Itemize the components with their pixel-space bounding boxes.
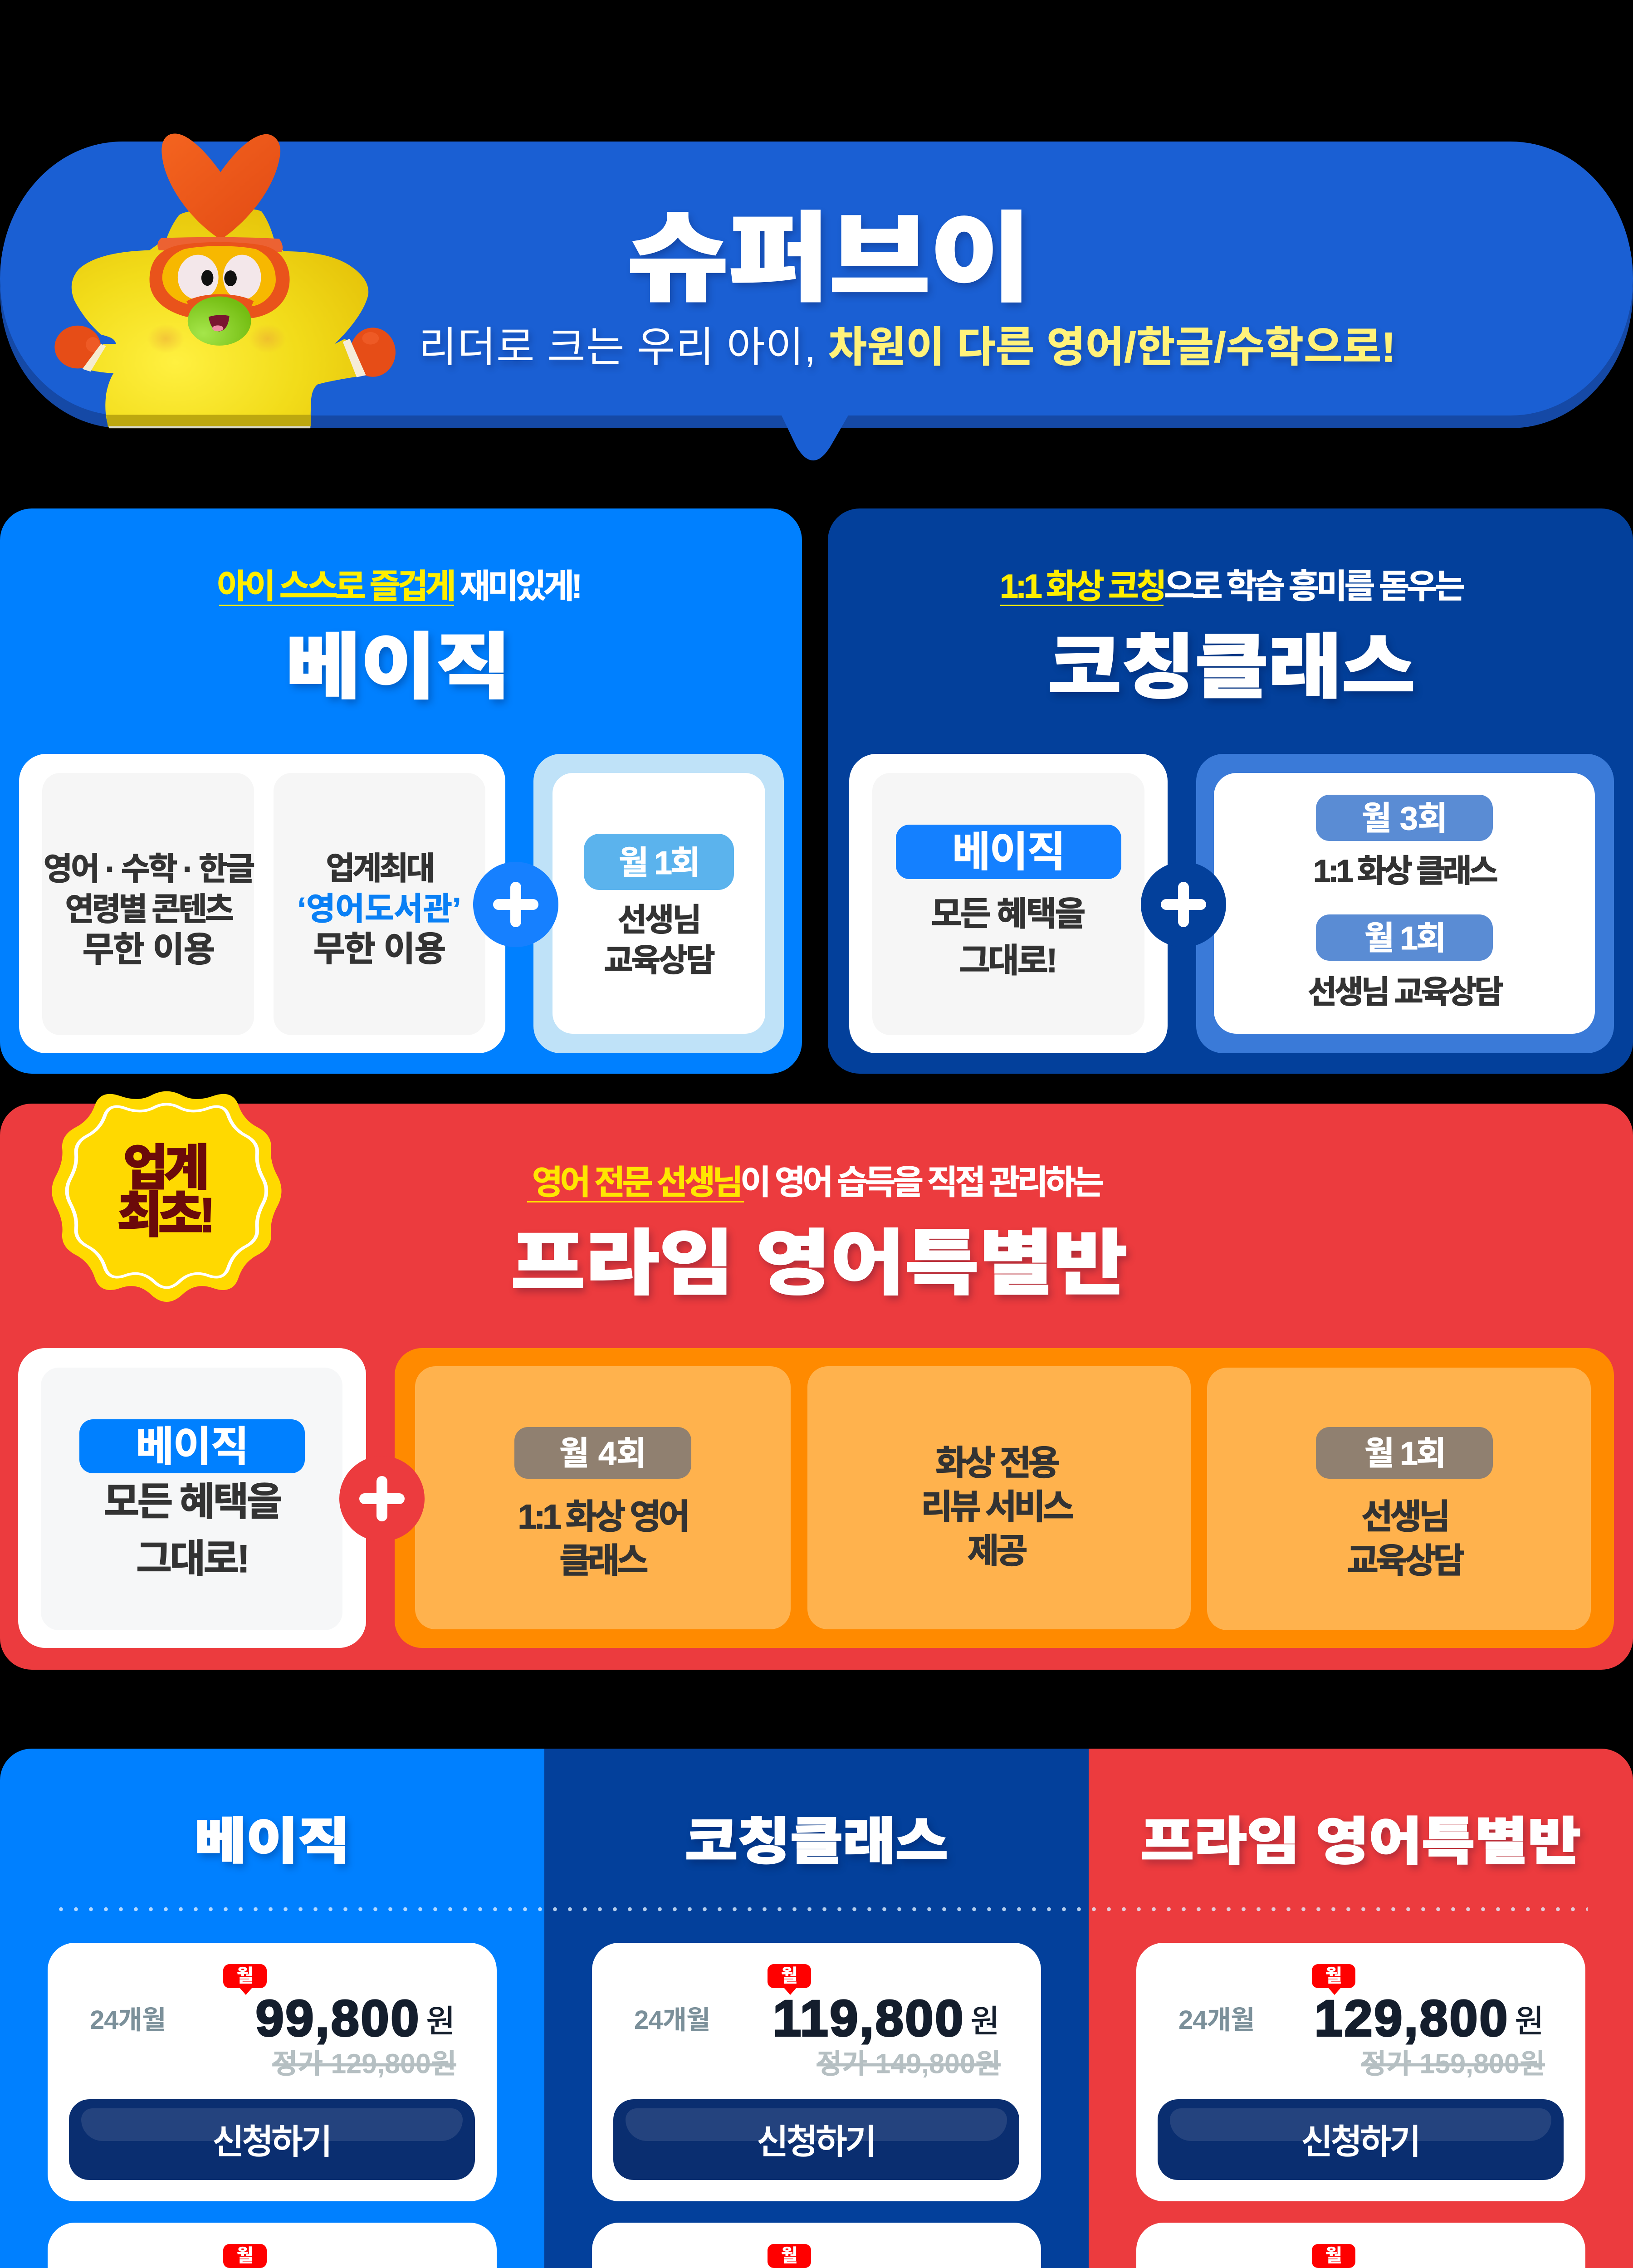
price card: 12 months: [592, 2223, 1041, 2268]
button: [69, 2099, 475, 2180]
pricing column: coaching class: [544, 1749, 1089, 2268]
monthly tag: [1312, 1964, 1355, 1988]
button: 신청하기: [757, 2123, 875, 2161]
consulting text: [1347, 1495, 1462, 1583]
panel title: 베이직: [286, 627, 511, 708]
badge label: 월 1회: [1364, 1436, 1444, 1472]
panel: prime English class: [0, 1104, 1633, 1670]
video class text: 1:1 화상 영어: [518, 1498, 687, 1536]
consulting text: 선생님: [1361, 1498, 1447, 1536]
subtitle: 영어 전문 선생님이 영어 습득을 직접 관리하는: [532, 1163, 1101, 1201]
feature text: library: 무한 이용: [313, 930, 445, 969]
basic text: 그대로!: [136, 1537, 248, 1581]
seal badge: industry first: 최초!: [117, 1188, 211, 1242]
badge: monthly 1: [584, 834, 734, 890]
consulting text: [604, 900, 714, 981]
panel title: 프라임 영어특별반: [511, 1224, 1128, 1303]
monthly tag: 월: [237, 2246, 253, 2266]
price card: 24 months: [592, 1943, 1041, 2201]
tagline: 리더로 크는 우리 아이, 차원이 다른 영어/한글/수학으로!: [419, 324, 1396, 371]
review text: [921, 1442, 1071, 1573]
basic badge: [896, 825, 1121, 879]
monthly tag: 월: [1325, 1966, 1342, 1986]
badge label: 월 3회: [1362, 801, 1447, 837]
bubble main surface: [0, 142, 1633, 415]
panel title: 코칭클래스: [1048, 629, 1415, 707]
monthly tag: [1312, 2244, 1355, 2268]
white card: [849, 754, 1168, 1053]
feature text: content: 연령별 콘텐츠: [65, 892, 232, 927]
badge label: 월 1회: [619, 845, 699, 881]
feature: content: [42, 773, 254, 1035]
review text: 제공: [968, 1532, 1025, 1570]
monthly tag: 월: [237, 1966, 253, 1986]
monthly tag: [768, 2244, 811, 2268]
feature text: content: [44, 849, 253, 971]
monthly tag: 월: [1325, 2246, 1342, 2266]
monthly tag: [223, 1964, 267, 1988]
feature text: content: 영어 · 수학 · 한글: [44, 851, 253, 886]
button: [1158, 2099, 1564, 2180]
consulting text: 선생님: [617, 902, 700, 938]
icon: plus: [339, 1456, 425, 1541]
basic badge: [79, 1419, 305, 1473]
panel: coaching class: [828, 508, 1633, 1074]
icon: plus: [1141, 862, 1226, 947]
consulting inner card: [552, 773, 765, 1034]
seal badge: industry first: [45, 1084, 290, 1311]
column title: 베이직: [195, 1814, 350, 1869]
subtitle: 아이 스스로 즐겁게 재미있게!: [217, 567, 580, 605]
column title: 프라임 영어특별반: [1141, 1813, 1581, 1870]
subtitle underline: [219, 605, 454, 606]
regular price: 정가 159,800원: [1361, 2048, 1545, 2079]
feature text: library: ‘영어도서관’: [298, 891, 461, 926]
badge label: 월 1회: [1364, 920, 1444, 957]
monthly tag: [768, 1964, 811, 1988]
price: 119,800: [773, 1990, 965, 2047]
subtitle underline: [527, 1201, 744, 1202]
consulting text: 교육상담: [1347, 1542, 1462, 1580]
badge: monthly 1: [1316, 914, 1493, 961]
button: [613, 2099, 1019, 2180]
seal badge: industry first: 업계: [123, 1140, 206, 1195]
basic badge label: 베이직: [136, 1424, 248, 1470]
basic text: 모든 혜택을: [931, 895, 1084, 933]
currency: 원: [426, 2004, 455, 2039]
consulting card: [533, 754, 784, 1053]
pricing column: basic: [0, 1749, 544, 2268]
badge: monthly 1: [1316, 1427, 1493, 1479]
monthly tag: 월: [781, 1966, 797, 1986]
term: 24개월: [90, 2005, 166, 2035]
feature text: library: 업계최대: [326, 851, 433, 886]
badge: monthly 4: [514, 1427, 691, 1479]
feature: library: [274, 773, 485, 1035]
icon: yellow star mascot with goggles: [45, 118, 408, 445]
review text: 화상 전용: [935, 1444, 1057, 1482]
class text: 1:1 화상 클래스: [1313, 853, 1496, 889]
orange card: [395, 1348, 1614, 1648]
bubble tail: [771, 408, 862, 467]
white feature card: [19, 754, 505, 1053]
subtitle: 1:1 화상 코칭으로 학습 흥미를 돋우는: [1000, 567, 1462, 605]
cell: consulting: [1207, 1368, 1591, 1630]
price: 99,800: [255, 1990, 420, 2047]
white card: [18, 1348, 366, 1648]
grey inner card: [872, 773, 1144, 1035]
pricing column: prime English class: [1089, 1749, 1633, 2268]
price card: 24 months: [48, 1943, 497, 2201]
grey inner card: [41, 1368, 342, 1630]
cell: video class: [415, 1366, 791, 1629]
consulting text: 교육상담: [604, 943, 714, 978]
monthly tag: 월: [781, 2246, 797, 2266]
column title: 코칭클래스: [685, 1813, 948, 1870]
button: 신청하기: [212, 2123, 330, 2161]
video class text: [518, 1495, 687, 1583]
feature text: content: 무한 이용: [83, 931, 214, 969]
feature text: library: [298, 848, 461, 971]
basic text: 모든 혜택을: [103, 1480, 280, 1524]
consulting text: 선생님 교육상담: [1308, 974, 1501, 1010]
basic text: [103, 1473, 280, 1588]
basic text: [931, 890, 1084, 984]
currency: 원: [1515, 2004, 1544, 2039]
basic text: 그대로!: [959, 942, 1056, 979]
cell: review service: [807, 1366, 1191, 1629]
button: 신청하기: [1301, 2123, 1419, 2161]
video class text: 클래스: [559, 1542, 645, 1580]
basic badge label: 베이직: [952, 829, 1065, 875]
panel: basic plan: [0, 508, 802, 1074]
regular price: 정가 149,800원: [816, 2048, 1001, 2079]
title: 슈퍼브이: [627, 205, 1031, 313]
bubble depth layer: [0, 154, 1633, 428]
badge: monthly 3: [1316, 795, 1493, 841]
hero speech bubble banner: [0, 118, 1633, 467]
currency: 원: [970, 2004, 999, 2039]
blue card: [1196, 754, 1614, 1053]
price card: 12 months: [1136, 2223, 1585, 2268]
price: 129,800: [1315, 1990, 1509, 2047]
regular price: 정가 129,800원: [272, 2048, 456, 2079]
price card: 12 months: [48, 2223, 497, 2268]
term: 24개월: [634, 2005, 710, 2035]
white inner card: [1214, 773, 1595, 1034]
term: 24개월: [1178, 2005, 1254, 2035]
review text: 리뷰 서비스: [921, 1488, 1071, 1527]
badge label: 월 4회: [559, 1436, 646, 1472]
icon: plus: [473, 862, 558, 947]
price card: 24 months: [1136, 1943, 1585, 2201]
monthly tag: [223, 2244, 267, 2268]
subtitle underline: [1000, 605, 1164, 606]
